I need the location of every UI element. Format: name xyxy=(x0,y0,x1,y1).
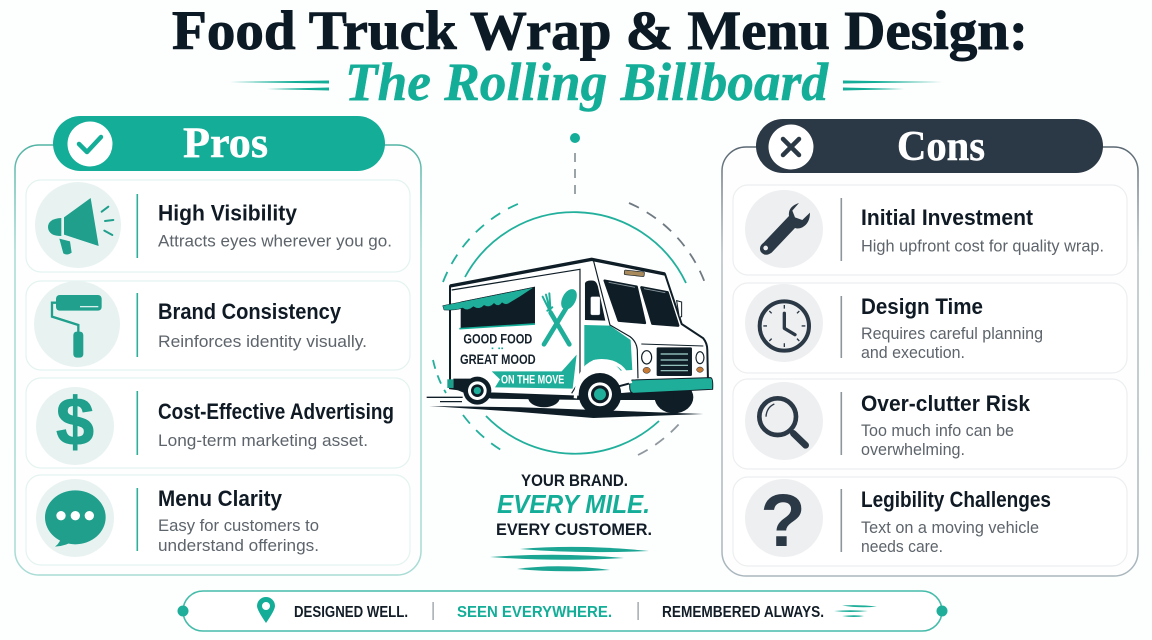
tagline speed swooshes xyxy=(490,547,649,571)
con: legibility challenges: needs care. xyxy=(861,537,943,556)
pro: brand consistency: Reinforces identity visually. xyxy=(158,332,367,351)
rear bumper xyxy=(447,379,453,388)
side panel outline xyxy=(452,269,580,393)
pro: menu clarity: understand offerings. xyxy=(158,536,319,555)
front wheel arch xyxy=(575,361,631,398)
rear wheel xyxy=(463,377,491,405)
icon: speech bubble xyxy=(45,490,106,547)
wrap text: great mood: GREAT MOOD xyxy=(460,351,536,367)
footer text: seen everywhere: SEEN EVERYWHERE. xyxy=(457,604,612,621)
wrap text: good food: GOOD FOOD xyxy=(463,330,532,346)
con: over-clutter risk: Too much info can be xyxy=(861,421,1014,440)
tagline: your brand: YOUR BRAND. xyxy=(521,471,628,490)
subtitle right speed lines xyxy=(843,80,942,90)
icon: x mark xyxy=(768,124,814,170)
icon: paint roller xyxy=(52,295,102,358)
roof band xyxy=(450,259,665,286)
awning xyxy=(443,287,534,310)
far wheels xyxy=(528,381,693,413)
footer text: remembered always: REMEMBERED ALWAYS. xyxy=(662,604,824,621)
cab edge line xyxy=(593,260,638,378)
pro: cost-effective advertising: Long-term marketing asset. xyxy=(158,431,368,450)
con: initial investment: High upfront cost for quality wrap. xyxy=(861,236,1104,256)
title: Food Truck Wrap & Menu Design: xyxy=(172,0,1028,61)
cons heading: Cons xyxy=(897,124,985,170)
wrap dots xyxy=(492,346,504,351)
fork and spoon xyxy=(543,287,580,344)
door panel xyxy=(584,325,632,371)
subtitle: The Rolling Billboard xyxy=(345,52,829,112)
truck body xyxy=(450,259,708,397)
windshield left xyxy=(605,281,645,323)
window sill xyxy=(459,324,535,329)
con: design time: and execution. xyxy=(861,343,965,362)
con: legibility challenges: Text on a moving vehicle xyxy=(861,518,1039,537)
pro: cost-effective advertising: Cost-Effective Advertising xyxy=(158,399,394,424)
con: initial investment xyxy=(733,185,1127,275)
pros header pill xyxy=(53,116,385,171)
con: over-clutter risk: overwhelming. xyxy=(861,440,965,459)
pro: cost-effective advertising xyxy=(26,378,410,468)
cons header pill xyxy=(756,119,1103,173)
panel: cons xyxy=(722,119,1138,576)
door window xyxy=(585,281,605,321)
service window xyxy=(461,287,535,328)
icon: magnifying glass xyxy=(759,398,806,445)
footer speed lines xyxy=(834,605,877,617)
icon: location pin xyxy=(257,597,275,623)
illustration: food truck xyxy=(427,259,713,418)
wrap text: on the move: ON THE MOVE xyxy=(501,372,564,386)
con: initial investment: Initial Investment xyxy=(861,205,1034,230)
con: legibility challenges xyxy=(733,477,1127,566)
tagline: every customer: EVERY CUSTOMER. xyxy=(496,520,652,539)
pro: menu clarity: Easy for customers to xyxy=(158,516,319,535)
roof marker xyxy=(624,270,644,277)
pro: high visibility: High Visibility xyxy=(158,200,298,226)
center tagline xyxy=(496,471,652,539)
orbit rings around the truck xyxy=(433,203,705,455)
pro: menu clarity xyxy=(26,475,410,565)
pro: brand consistency: Brand Consistency xyxy=(158,299,342,324)
hood line xyxy=(641,344,703,346)
con: over-clutter risk: Over-clutter Risk xyxy=(861,391,1031,416)
front wheel xyxy=(579,373,621,416)
icon: check mark xyxy=(68,122,112,166)
pros panel frame xyxy=(15,145,421,575)
grille xyxy=(657,347,692,376)
panel: pros xyxy=(15,116,421,575)
pro: high visibility xyxy=(26,180,410,272)
con: design time xyxy=(733,283,1127,373)
footer pill xyxy=(183,591,942,631)
pin dot and dashed connector xyxy=(570,133,580,198)
pros heading: Pros xyxy=(183,120,268,167)
side mirror xyxy=(591,297,600,315)
right mirror xyxy=(677,301,682,317)
icon: clock xyxy=(760,301,809,351)
windshield right xyxy=(641,287,678,326)
icon: question mark: ? xyxy=(760,479,806,562)
footer text: designed well: DESIGNED WELL. xyxy=(294,604,408,621)
con: over-clutter risk xyxy=(733,379,1127,469)
indicators xyxy=(643,367,703,373)
tagline: every mile: EVERY MILE. xyxy=(497,489,650,519)
icon: megaphone xyxy=(48,198,113,255)
pro: menu clarity: Menu Clarity xyxy=(158,486,283,511)
con: legibility challenges: Legibility Challenges xyxy=(861,487,1051,512)
footer banner xyxy=(178,591,948,631)
icon: dollar sign: $ xyxy=(56,384,94,460)
ground shadow and speed lines xyxy=(427,397,703,418)
front bumper xyxy=(630,378,713,393)
wrap banner xyxy=(492,355,577,389)
pro: brand consistency xyxy=(26,281,410,370)
underbody xyxy=(453,379,673,400)
con: design time: Design Time xyxy=(861,294,983,319)
subtitle left speed lines xyxy=(230,80,329,90)
footer end dots xyxy=(178,606,948,616)
headlights xyxy=(642,351,704,364)
con: design time: Requires careful planning xyxy=(861,324,1043,343)
cons panel frame xyxy=(722,147,1138,576)
icon: wrench xyxy=(760,203,810,255)
pro: high visibility: Attracts eyes wherever you go. xyxy=(158,232,392,250)
